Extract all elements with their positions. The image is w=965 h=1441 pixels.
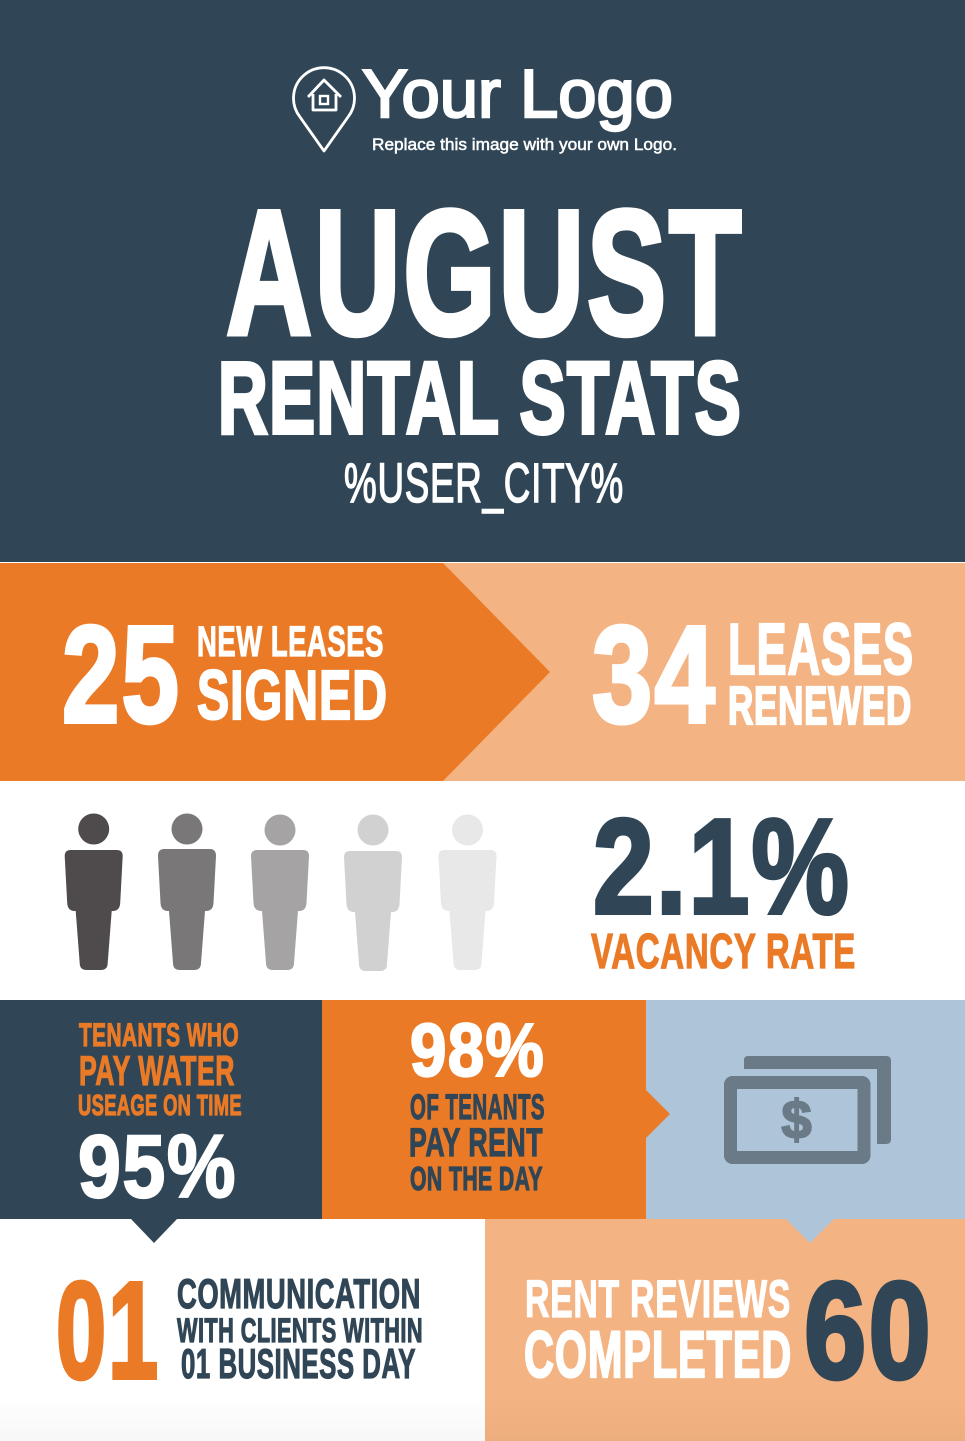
- label: pay water: PAY WATER: [79, 1047, 235, 1094]
- arrow: new leases: [0, 563, 550, 781]
- label: 01 business day: 01 BUSINESS DAY: [181, 1340, 416, 1387]
- person 1: [65, 814, 123, 970]
- logo tagline: Replace this image with your own Logo.: [372, 135, 677, 154]
- panel: vacancy: [0, 781, 965, 1000]
- panel: rent on the day: [322, 1000, 670, 1219]
- label: signed: SIGNED: [197, 656, 388, 734]
- icon: people row: [65, 814, 496, 971]
- person 3: [251, 814, 309, 970]
- person 2: [158, 814, 216, 970]
- panel: money: [646, 1000, 965, 1219]
- stat: 34: 34: [592, 598, 717, 752]
- pointer: rent panel: [646, 1090, 670, 1138]
- label: useage on time: USEAGE ON TIME: [78, 1090, 242, 1122]
- stat: 95%: 95%: [78, 1116, 237, 1216]
- label: rent reviews: RENT REVIEWS: [525, 1270, 791, 1329]
- stat: 98%: 98%: [410, 1008, 545, 1092]
- panel: rent reviews: [485, 1219, 965, 1441]
- label: on the day: ON THE DAY: [410, 1160, 543, 1197]
- label: new leases: NEW LEASES: [197, 618, 384, 666]
- label: of tenants: OF TENANTS: [410, 1088, 545, 1127]
- stat: 60: 60: [804, 1254, 933, 1408]
- stat: 01: 01: [56, 1254, 160, 1408]
- pointer: money panel: [786, 1219, 834, 1243]
- label: completed: COMPLETED: [524, 1317, 792, 1391]
- label: pay rent: PAY RENT: [409, 1121, 543, 1165]
- panel: header: [0, 0, 965, 562]
- logo name: Your Logo: [362, 56, 673, 132]
- icon: banknotes: [730, 1056, 891, 1158]
- label: with clients within: WITH CLIENTS WITHIN: [177, 1312, 423, 1350]
- person 4: [344, 814, 402, 971]
- icon: location pin with house: [294, 68, 354, 151]
- stat: 25: 25: [62, 598, 181, 752]
- city placeholder: %USER_CITY%: [344, 451, 624, 514]
- label: communication: COMMUNICATION: [177, 1270, 421, 1317]
- stat: 2.1%: 2.1%: [593, 791, 851, 942]
- panel: communication: [0, 1219, 485, 1441]
- icon: banknotes: $: [781, 1090, 813, 1150]
- logo: [294, 56, 677, 154]
- panel: leases: [0, 563, 965, 781]
- person 5: [438, 814, 496, 970]
- label: tenants who: TENANTS WHO: [79, 1017, 239, 1053]
- pointer: water panel: [131, 1219, 177, 1243]
- panel: water: [0, 1000, 322, 1243]
